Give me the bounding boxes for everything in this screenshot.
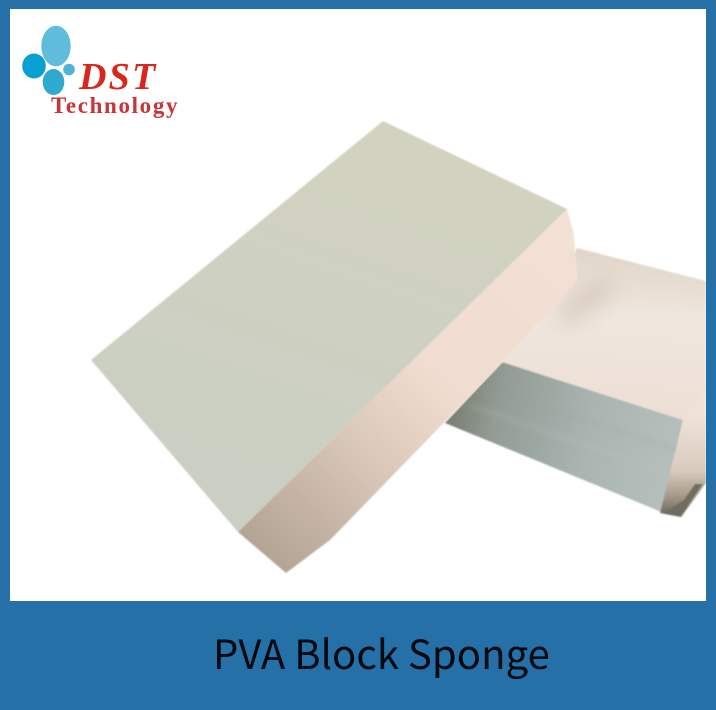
company logo: [22, 26, 179, 118]
logo icon: blue bubbles: [22, 26, 75, 95]
main block top face: [91, 121, 567, 532]
product photo: stacked PVA sponge blocks: [91, 121, 706, 573]
caption: product name: PVA Block Sponge: [213, 623, 550, 681]
foil highlight: [670, 483, 703, 510]
sheet bands on lower block front: [470, 386, 680, 478]
lower block front face: [445, 362, 683, 513]
plastic wrap at corner: [660, 392, 706, 517]
logo wordmark DST: DST: [78, 56, 157, 98]
main sponge block: [91, 121, 578, 573]
main block side face: [238, 209, 578, 573]
lower block top face: [502, 248, 706, 420]
shadow on lower block top: [556, 280, 613, 326]
lower wrapped sponge block: [445, 248, 706, 517]
logo wordmark Technology: Technology: [51, 93, 179, 118]
